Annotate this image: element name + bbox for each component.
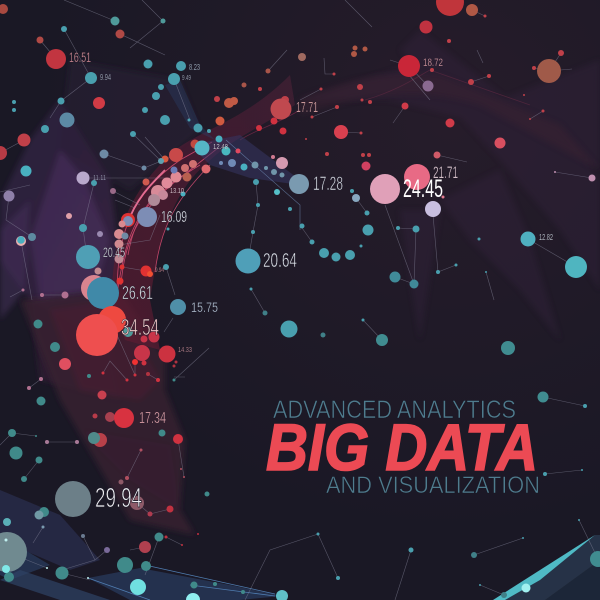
label 20.45: 20.45	[103, 245, 125, 260]
label 15.75: 15.75	[191, 299, 218, 315]
label 24.45: 24.45	[403, 175, 443, 203]
purple haze, left side	[0, 60, 200, 400]
faint polygon web, upper right	[300, 30, 600, 340]
subtitle: advanced analytics: ADVANCED ANALYTICS	[273, 396, 516, 424]
label 17.34: 17.34	[139, 410, 166, 427]
nodes: muted teal, lower left	[0, 320, 530, 600]
label 20.64: 20.64	[263, 250, 297, 272]
label 29.94: 29.94	[95, 482, 142, 513]
nodes: pale pink and lilac	[4, 80, 596, 298]
plum ribbon, lower left	[20, 290, 195, 535]
label 12.48: 12.48	[213, 144, 228, 151]
label 8.23: 8.23	[189, 63, 200, 72]
value labels	[69, 49, 553, 513]
label 26.61: 26.61	[122, 283, 153, 303]
red and pink arc ribbon	[112, 70, 600, 350]
nodes: cluster along arc	[81, 136, 284, 309]
blue ribbons through the arc crest	[165, 80, 300, 230]
heading: big data: BIG DATA	[266, 410, 538, 484]
label 18.72: 18.72	[423, 57, 443, 69]
label 21.71: 21.71	[433, 164, 458, 182]
teal polygon, bottom right	[493, 535, 600, 600]
label 34.54: 34.54	[121, 314, 159, 340]
label 16.09: 16.09	[161, 209, 187, 226]
label 17.71: 17.71	[296, 99, 318, 116]
label 9.49: 9.49	[182, 75, 191, 82]
label 13.10: 13.10	[170, 188, 184, 195]
label 9.94: 9.94	[100, 73, 111, 82]
blue polygons, bottom left	[0, 490, 282, 600]
label 9.94 small: 9.94	[155, 267, 164, 274]
title block	[266, 396, 540, 499]
label 12.82: 12.82	[539, 233, 553, 242]
label 16.51: 16.51	[69, 49, 91, 65]
nodes: red cluster, lower left	[59, 306, 199, 553]
subtitle: and visualization: AND VISUALIZATION	[326, 472, 540, 499]
nodes: reds, upper area	[0, 0, 564, 198]
label 11.11: 11.11	[93, 175, 106, 182]
label 17.28: 17.28	[313, 174, 343, 195]
label 14.33: 14.33	[178, 347, 192, 354]
